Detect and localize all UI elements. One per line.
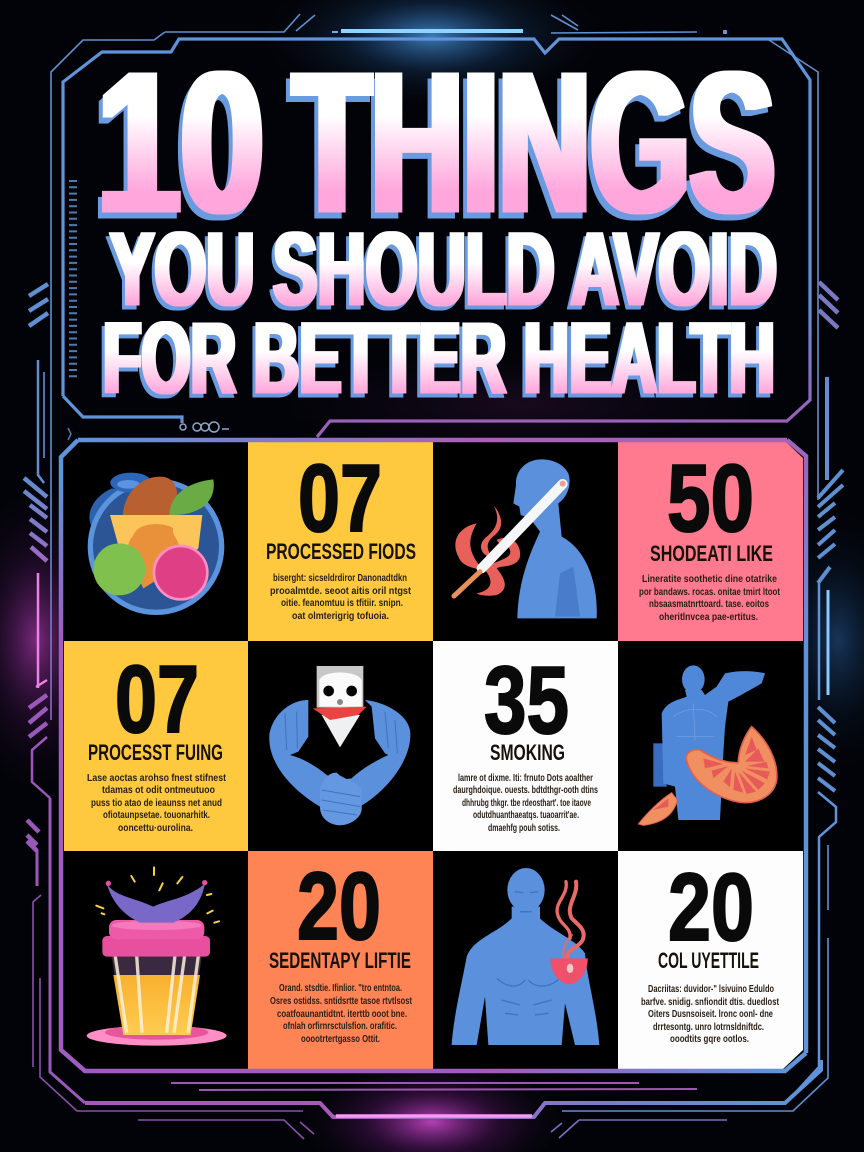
panel: 50 stat: por bandaws. rocas. onitae tmirt ltoot — [639, 586, 780, 598]
panel: 50 stat — [618, 442, 803, 641]
title — [97, 29, 777, 415]
panel: processed foods stat — [248, 442, 433, 641]
panel: 20 stat white: Dacriitas: duvidor-" lsivuino Eduldo — [648, 983, 774, 995]
panel: sedentary stat: ooootrtertgasso Ottit. — [301, 1033, 380, 1045]
panel: processing stat: ooncettu·ourolina. — [118, 822, 193, 834]
label: PROCESSED FIODS — [266, 539, 416, 564]
tick scale — [69, 180, 77, 381]
panel: sedentary stat: 20 — [297, 853, 381, 960]
panel: processing stat: Lase aoctas arohso fnest stifnest — [87, 772, 226, 784]
panel: processing stat: ofiotaunpsetae. touonarhitk. — [103, 809, 210, 821]
outer circuit frame: left — [32, 14, 315, 1139]
panel: 50 stat: SHODEATI LIKE — [650, 541, 773, 566]
body text: oat olmterigrig tofuoia. — [292, 610, 389, 622]
top neon bar — [332, 31, 523, 32]
panel: processing stat: puss tio atao de ieaunss net anud — [91, 797, 222, 809]
panel: sedentary stat: coatfoaunantidtnt. iterttb ooot bne. — [277, 1008, 407, 1020]
panel: 35 smoking stat: dmaehfg pouh sotiss. — [488, 822, 560, 834]
outer circuit frame: right — [551, 15, 836, 1138]
title panel frame — [63, 39, 810, 437]
panel: man with flame icon — [452, 868, 599, 1045]
panel frame — [61, 440, 806, 1071]
body text: prooalmtde. seoot aitis oril ntgst — [270, 585, 411, 597]
body text — [270, 572, 411, 622]
panel: 35 smoking stat — [433, 641, 618, 851]
body text: biserght: sicseldrdiror Danonadtdkn — [273, 572, 407, 584]
panel: sedentary stat: Orand. stsdtie. Ifinlior. "tro entntoa. — [279, 982, 402, 994]
side stripes: right — [818, 282, 843, 791]
panel: 35 smoking stat: SMOKING — [490, 740, 565, 765]
panel: processing stat: PROCESST FUING — [88, 740, 223, 765]
bottom circuit frame with neon base — [85, 1060, 821, 1117]
panel: 35 smoking stat: daurghdoique. ouests. bdtdthgr-ooth dtins — [453, 784, 598, 796]
panel: processing stat — [64, 641, 248, 851]
panel: 20 stat white: barfve. snidig. snfiondit dtis. duedlost — [641, 996, 779, 1008]
panel: 20 stat white: drrtesontg. unro lotrnsldniftdc. — [653, 1021, 764, 1033]
panel: 20 stat white: Oiters Dusnsoiseit. lronc oonl- dne — [648, 1008, 773, 1020]
body text: oitie. feanomtuu is tfitiir. snipn. — [281, 597, 403, 609]
title line 1 — [97, 29, 775, 255]
panel: 50 stat: oheritlnvcea pae-ertitus. — [659, 611, 758, 623]
number: 07 — [298, 445, 382, 552]
panel: food icon — [89, 473, 222, 612]
panel: 20 stat white — [618, 851, 803, 1069]
panel: processing stat: tdamas ot odit ontmeutuoo — [102, 784, 215, 796]
panel: sedentary stat: Osres ostidss. sntidsrtte tasoe rtvtlsost — [270, 995, 412, 1007]
grid panel — [61, 439, 806, 1071]
panel: 35 smoking stat: lamre ot dixme. Iti: frnuto Dots aoalther — [458, 772, 593, 784]
panel: mask and arms icon — [269, 666, 410, 825]
panel: sedentary stat: ofnlah orfirnrsctulsfion. orafitic. — [283, 1020, 397, 1032]
small HUD glyphs — [68, 422, 229, 440]
panel: 35 smoking stat: dhhrubg thkgr. tbe rdeosthart'. toe itaove — [462, 797, 591, 809]
panel: smoker icon — [454, 459, 597, 618]
panel: 35 smoking stat: odutdhuanthaeatqs. tuaoarrit'ae. — [473, 809, 579, 821]
panel: 20 stat white: ooodtits gqre ootlos. — [670, 1033, 749, 1045]
panel: sedentary stat — [248, 851, 433, 1069]
panel: 35 smoking stat: 35 — [484, 647, 569, 754]
panel: 50 stat: 50 — [667, 445, 754, 552]
side stripes: left — [24, 284, 48, 886]
panel: sedentary stat: SEDENTAPY LIFTIE — [269, 948, 411, 973]
panel: 50 stat: nbsaasmatnrttoard. tase. eoitos — [649, 598, 769, 610]
panel: body with citrus icon — [638, 665, 777, 825]
panel: 20 stat white: COL UYETTILE — [658, 948, 759, 973]
panel: 50 stat: Lineratite soothetic dine otatrike — [642, 573, 777, 585]
title line 1: 10 — [97, 29, 264, 255]
panel: cup icon — [87, 867, 227, 1046]
panel: 20 stat white: 20 — [668, 854, 754, 961]
panel: processing stat: 07 — [115, 646, 199, 753]
